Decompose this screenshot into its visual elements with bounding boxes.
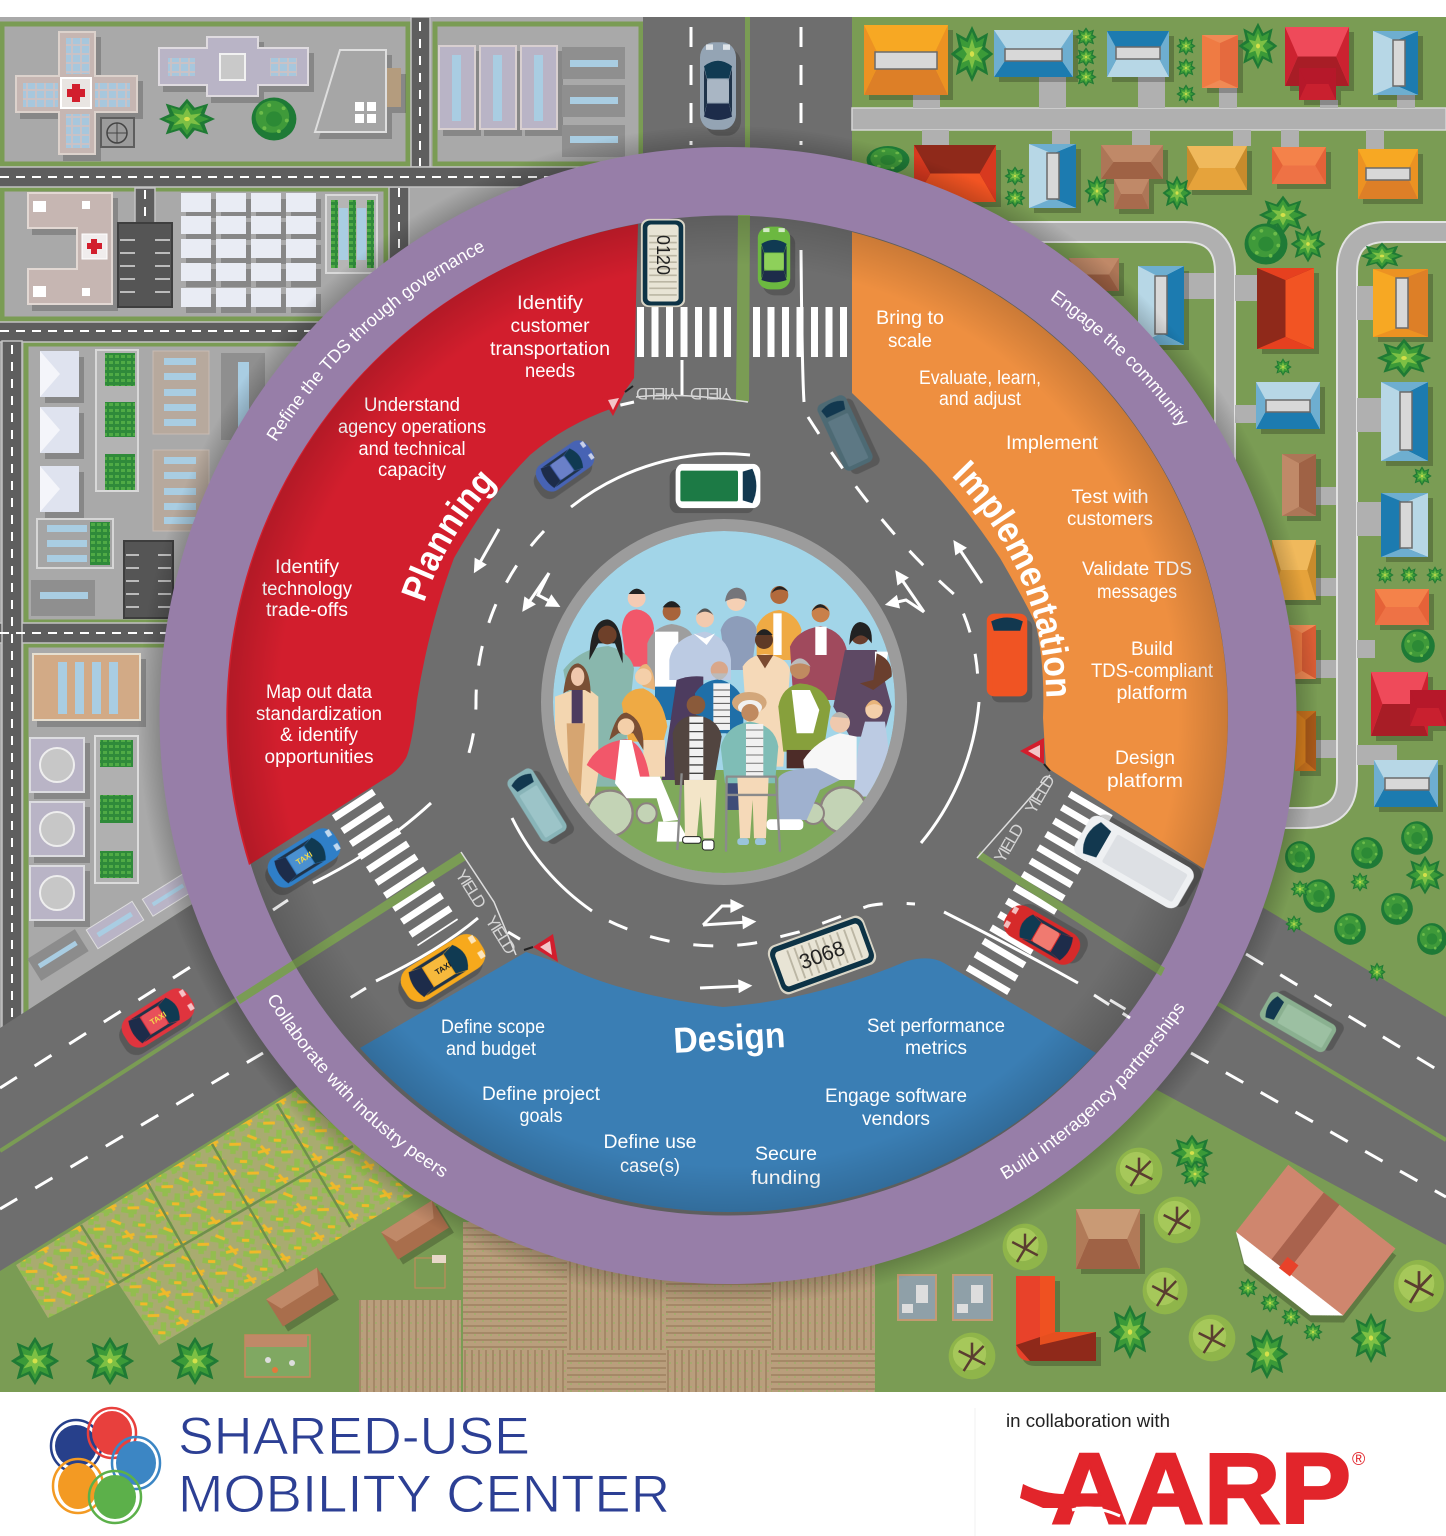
- hospital: [16, 32, 137, 154]
- trapezoid building: [315, 50, 401, 132]
- warehouse skylights: [452, 55, 543, 121]
- step: map out data: & identify: [280, 725, 358, 746]
- yield signs: [524, 386, 1050, 962]
- city long buildings: [153, 351, 265, 531]
- clinic: [28, 193, 112, 304]
- ring label: build: Build interagency partnerships: [1000, 1004, 1184, 1180]
- step: validate: Validate TDS: [1082, 559, 1192, 580]
- farm plots: [16, 1091, 875, 1392]
- houses: [864, 25, 1446, 807]
- step: implement: Implement: [1006, 433, 1099, 454]
- step: build: Build: [1131, 639, 1173, 660]
- yield bars: [461, 395, 1050, 955]
- yield text north: YIELD: [636, 384, 678, 403]
- north road: [643, 17, 852, 160]
- logo wordmark: MOBILITY CENTER: [178, 1465, 670, 1524]
- step: map out data: opportunities: [264, 747, 374, 768]
- middle row: [555, 619, 892, 810]
- step: define scope: Define scope: [441, 1017, 545, 1038]
- design sector: [360, 952, 1096, 1212]
- house skylights: [875, 40, 1429, 790]
- step: define use cases: case(s): [620, 1156, 680, 1177]
- taxi: red: [117, 983, 199, 1053]
- step: build: platform: [1116, 683, 1188, 704]
- southwest road: [0, 904, 297, 1271]
- step: secure funding: funding: [751, 1168, 821, 1189]
- warehouses: [439, 46, 557, 129]
- tan building: [33, 654, 140, 720]
- large farmhouse: [1236, 1164, 1396, 1322]
- driveways: [913, 77, 1415, 765]
- planning sector: [226, 224, 638, 865]
- step: identify technology: trade-offs: [266, 600, 348, 621]
- block frames: [2, 24, 641, 1025]
- step: engage vendors: vendors: [862, 1109, 930, 1130]
- step: define scope: and budget: [446, 1039, 537, 1060]
- city streets: [0, 17, 643, 1031]
- logo mark: [51, 1408, 160, 1523]
- yield text southeast: [991, 771, 1059, 866]
- step: engage vendors: Engage software: [825, 1086, 967, 1107]
- design title: Design: [672, 1014, 786, 1061]
- ring label: collaborate: Collaborate with industry peers: [269, 994, 446, 1177]
- car: lime: [758, 227, 790, 289]
- van: green: [676, 464, 760, 508]
- step: design platform: platform: [1107, 771, 1183, 792]
- step: test: customers: [1067, 509, 1153, 530]
- roundabout shadow: [138, 126, 1318, 1306]
- car: blue: [531, 436, 599, 496]
- suburb streets: [852, 77, 1446, 818]
- step: understand agency: capacity: [378, 460, 446, 481]
- step: define use cases: Define use: [604, 1132, 696, 1153]
- step: identify customer needs: needs: [525, 361, 575, 382]
- bus 0120: 0120: [653, 235, 673, 275]
- step: identify customer needs: Identify: [517, 293, 584, 314]
- yield text north: [636, 384, 732, 403]
- panel: planning: [226, 224, 638, 865]
- trees in city: [159, 99, 215, 139]
- roundabout road surface: [228, 216, 1228, 1216]
- ring label: engage: Engage the community: [1050, 290, 1188, 426]
- ring label: refine: Refine the TDS through governance: [266, 243, 484, 441]
- yield text north: YIELD: [690, 384, 732, 403]
- taxi: red: TAXI: [148, 1010, 168, 1027]
- car: red coupe: [999, 900, 1085, 970]
- minivan: teal: [505, 766, 569, 844]
- island illustration: community: [540, 531, 910, 880]
- office building: [159, 37, 308, 96]
- taxi: blue: [263, 823, 345, 893]
- taxi: yellow: [395, 928, 491, 1008]
- bus 0120: [641, 219, 685, 307]
- step: identify customer needs: customer: [510, 316, 590, 337]
- van: white: [1071, 812, 1197, 912]
- yield text southwest: YIELD: [451, 866, 490, 912]
- farm barns: [266, 1201, 449, 1326]
- step: identify customer needs: transportation: [490, 339, 610, 360]
- inner edge shading: [228, 216, 1228, 1216]
- front row: [587, 692, 866, 852]
- vehicles: [117, 42, 1338, 1054]
- parking lot: [118, 223, 172, 307]
- yield text southwest: [451, 866, 520, 958]
- implementation sector: [852, 232, 1228, 869]
- taxi: blue: TAXI: [294, 850, 314, 867]
- step: design platform: Design: [1115, 748, 1175, 769]
- greenhouse column: [96, 350, 138, 491]
- farm palms: [11, 1337, 219, 1385]
- taxi: yellow: TAXI: [433, 960, 453, 977]
- diagonal sheds: [27, 874, 194, 981]
- step: understand agency: agency operations: [338, 417, 486, 438]
- bush: [252, 98, 296, 140]
- green panels lower: [95, 736, 138, 883]
- van: dark: [815, 393, 875, 473]
- farm pen: [245, 1255, 446, 1377]
- purple ring: [160, 147, 1296, 1284]
- step: secure funding: Secure: [755, 1144, 817, 1165]
- white roofs grid: [181, 193, 316, 307]
- step: define goals: Define project: [482, 1084, 601, 1105]
- bus 3068: [765, 913, 879, 997]
- car: grey sedan: [700, 42, 736, 130]
- step: map out data: standardization: [256, 704, 382, 725]
- storage tanks: [30, 738, 84, 920]
- step: validate: messages: [1097, 582, 1177, 603]
- step: map out data: Map out data: [266, 682, 372, 703]
- southeast road: [1156, 908, 1446, 1245]
- step: build: TDS-compliant: [1091, 661, 1214, 682]
- small block with parking: [31, 519, 173, 618]
- step: test: Test with: [1072, 487, 1148, 508]
- city district: [0, 17, 643, 1031]
- step: understand agency: Understand: [364, 395, 460, 416]
- lower-right trees: [949, 1135, 1444, 1379]
- footer divider: [974, 1408, 976, 1536]
- central island ring: [541, 519, 907, 885]
- lower-right lots: [898, 1209, 1140, 1361]
- suburb trees: [867, 23, 1446, 982]
- yield text southeast: YIELD: [991, 820, 1028, 866]
- road markings: [236, 215, 1165, 1018]
- sheds: [562, 47, 625, 157]
- AARP swoosh: [1020, 1484, 1075, 1508]
- planning title: Planning: [401, 471, 498, 601]
- green roof unit: [326, 195, 377, 273]
- step: evaluate: Evaluate, learn,: [919, 368, 1041, 389]
- logo wordmark: SHARED-USE: [178, 1407, 530, 1466]
- panel: design: [360, 952, 1096, 1212]
- step: bring to scale: scale: [888, 331, 932, 352]
- logo: shared-use mobility center: [51, 1407, 670, 1524]
- road medians: [236, 215, 1165, 1004]
- minivan: sage: [1258, 990, 1338, 1054]
- step: set metrics: metrics: [905, 1038, 967, 1059]
- bus 3068: 3068: [796, 937, 848, 974]
- logo: AARP: [1020, 1433, 1365, 1536]
- registered mark: ®: [1352, 1449, 1365, 1469]
- step: set metrics: Set performance: [867, 1016, 1005, 1037]
- helipad: [101, 118, 134, 147]
- panel: implementation: [852, 232, 1228, 869]
- step: identify technology: Identify: [275, 557, 340, 578]
- van: orange: [987, 614, 1027, 696]
- step: understand agency: and technical: [358, 439, 466, 460]
- step: evaluate: and adjust: [939, 389, 1022, 410]
- white pyramid roofs: [40, 351, 79, 512]
- step: bring to scale: Bring to: [876, 308, 944, 329]
- step: define goals: goals: [520, 1106, 562, 1127]
- collaboration label: in collaboration with: [1006, 1411, 1170, 1431]
- yield text southeast: YIELD: [1022, 771, 1059, 817]
- step: identify technology: technology: [262, 579, 352, 600]
- yield text southwest: YIELD: [481, 912, 520, 958]
- back row: [622, 586, 847, 720]
- crosswalks: [352, 332, 1092, 987]
- lane circle: [270, 250, 1130, 1018]
- lane arrows: [478, 529, 982, 988]
- implementation title: Implementation: [952, 460, 1070, 696]
